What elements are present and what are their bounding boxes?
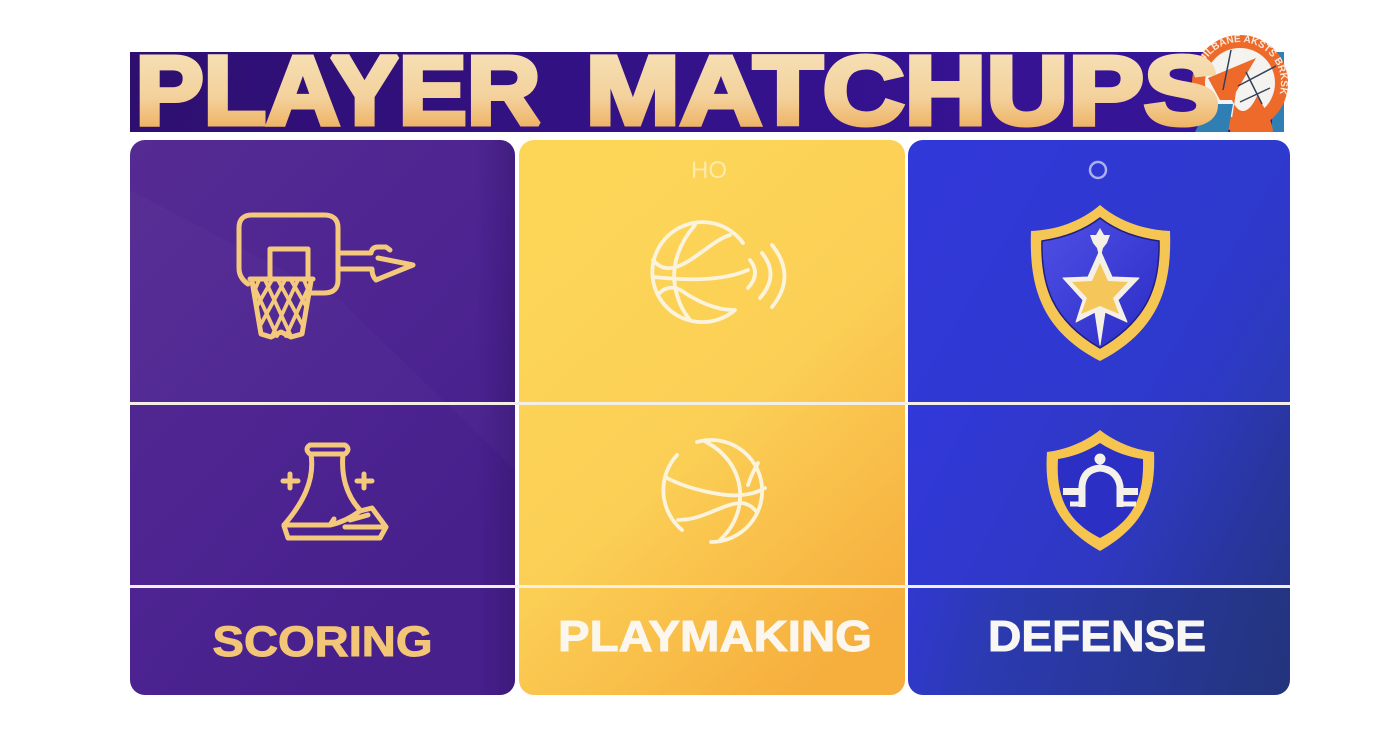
icon: star shield <box>1031 205 1170 361</box>
icon: basketball with sound waves <box>652 222 784 322</box>
label: playmaking: PLAYMAKING <box>558 612 872 661</box>
label: defense: DEFENSE <box>988 612 1206 661</box>
logo lettering: UILBANE AKSTS BRKSK <box>1201 35 1288 95</box>
title <box>136 36 1220 145</box>
icon: flask <box>283 445 386 538</box>
infographic <box>130 35 1290 695</box>
title banner <box>130 52 1284 132</box>
icon: basketball <box>663 440 765 542</box>
panel: playmaking <box>519 140 905 695</box>
title word 1: PLAYER <box>136 36 540 145</box>
faint text: HO: HO <box>691 157 727 184</box>
icon: basketball hoop <box>239 215 413 337</box>
panel: scoring <box>130 140 515 695</box>
icon: arch shield <box>1047 430 1154 551</box>
faint text: O <box>1090 162 1106 178</box>
panel: defense <box>908 140 1290 695</box>
logo: basketball badge <box>1192 35 1288 132</box>
label: scoring: SCORING <box>212 618 432 666</box>
title word 2: MATCHUPS <box>586 36 1220 145</box>
